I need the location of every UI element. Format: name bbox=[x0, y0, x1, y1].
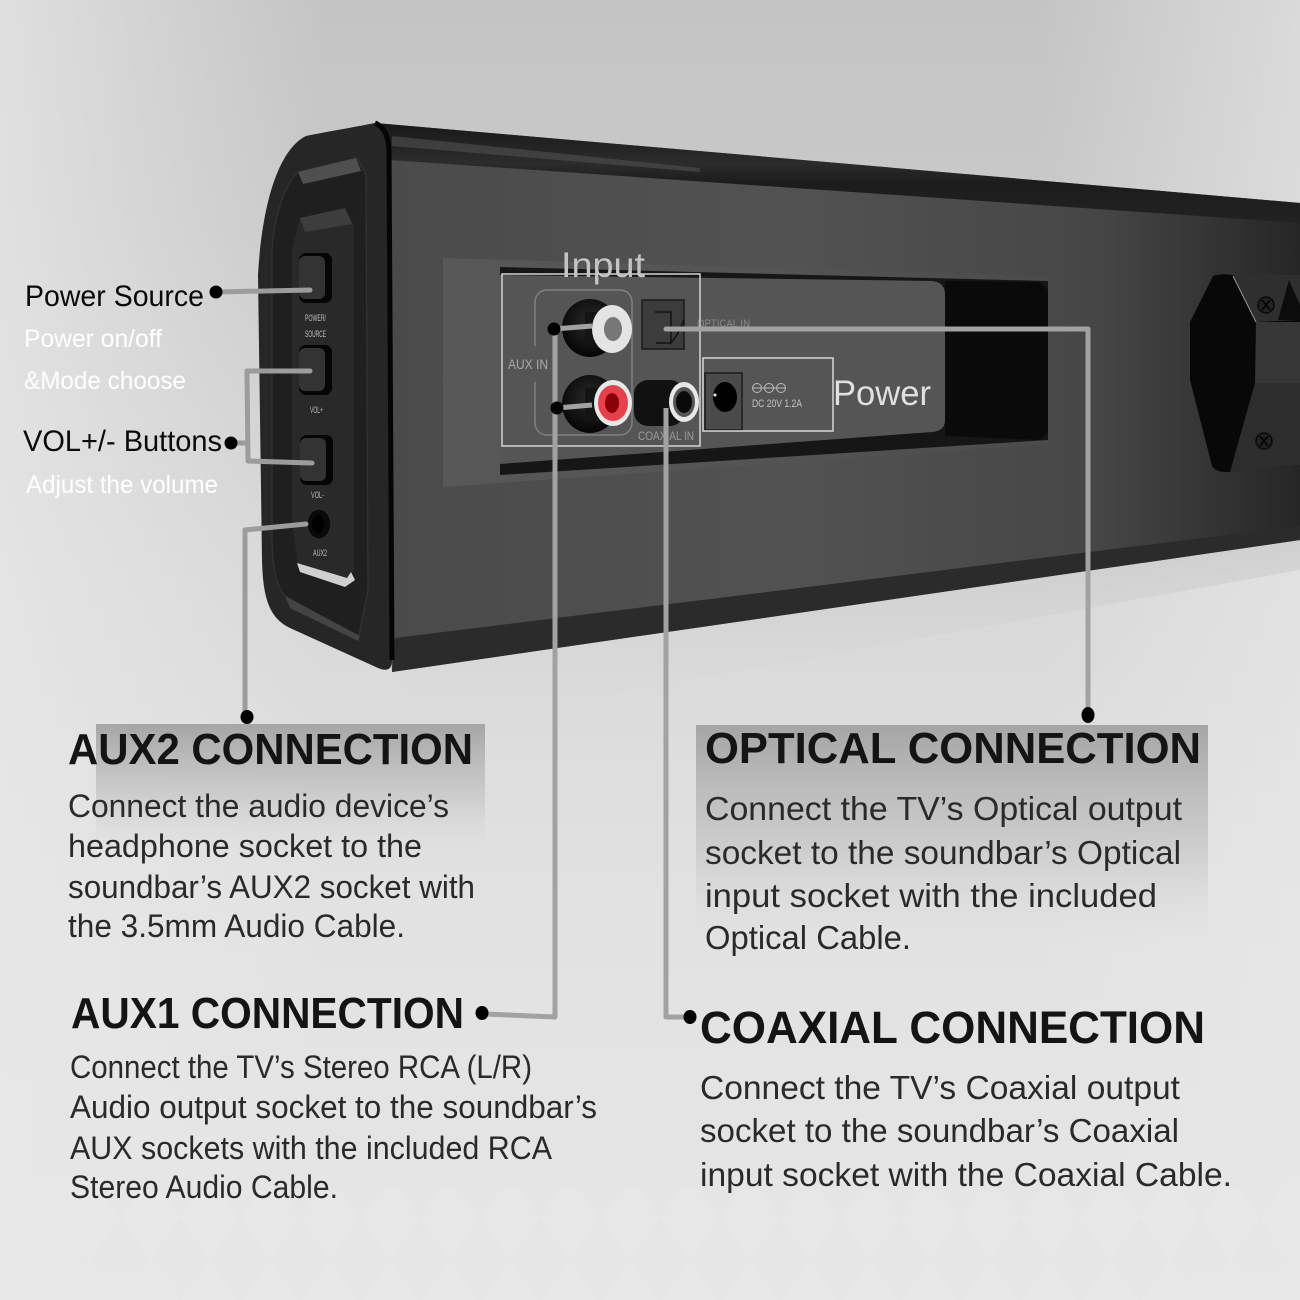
power button bbox=[299, 253, 332, 303]
optical socket: OPTICAL IN bbox=[697, 318, 750, 330]
rear recessed panel bbox=[443, 258, 1048, 487]
soundbar bbox=[258, 123, 1300, 672]
coaxial socket bbox=[634, 380, 699, 426]
panel highlight bottom bbox=[297, 563, 355, 587]
AUX2 jack bbox=[307, 509, 331, 539]
power label: Power bbox=[833, 374, 931, 413]
AUX2 body bbox=[68, 788, 475, 944]
VOL- button bbox=[300, 435, 333, 485]
coaxial body: Connect the TV’s Coaxial output bbox=[700, 1069, 1180, 1106]
soundbar top band bbox=[375, 123, 1300, 223]
soundbar bottom strip bbox=[392, 526, 1300, 672]
button panel bbox=[292, 208, 354, 586]
end cap seam bbox=[375, 123, 392, 660]
VOL+ button bbox=[299, 345, 332, 395]
panel: optical connection bbox=[696, 724, 1208, 956]
white RCA socket bbox=[562, 299, 632, 357]
panel: AUX2 connection bbox=[68, 724, 485, 944]
side labels: AUX2 bbox=[313, 548, 327, 558]
AUX2 backdrop bbox=[96, 724, 485, 854]
AUX inputs bracket: AUX IN bbox=[508, 356, 548, 372]
AUX inputs bracket bbox=[508, 290, 632, 435]
wall mount bracket bbox=[1190, 274, 1300, 472]
soundbar end cap bbox=[258, 123, 392, 670]
callout: volume buttons bbox=[23, 425, 222, 499]
side labels: VOL+ bbox=[310, 405, 323, 415]
optical body: input socket with the included bbox=[705, 877, 1157, 914]
callout: power source: Power Source bbox=[25, 280, 204, 313]
coaxial body: input socket with the Coaxial Cable. bbox=[700, 1156, 1232, 1193]
optical body: Connect the TV’s Optical output bbox=[705, 790, 1182, 827]
cavity opening bbox=[945, 281, 1048, 440]
lower bevel highlight bbox=[285, 596, 360, 641]
callout: volume buttons: VOL+/- Buttons bbox=[23, 425, 222, 458]
soundbar reflection bbox=[390, 540, 1300, 725]
connector: AUX1 bbox=[476, 322, 592, 1020]
AUX2 body: the 3.5mm Audio Cable. bbox=[68, 908, 405, 944]
red RCA socket bbox=[562, 375, 632, 433]
optical body: Optical Cable. bbox=[705, 919, 911, 956]
callout: power source bbox=[24, 280, 204, 395]
AUX1 heading: AUX1 CONNECTION bbox=[71, 989, 464, 1038]
upper bevel highlight bbox=[298, 158, 361, 184]
coaxial label: COAXIAL IN bbox=[638, 429, 694, 443]
callout: power source: &Mode choose bbox=[24, 367, 186, 395]
connector: coaxial bbox=[666, 408, 696, 1024]
AUX1 body: Audio output socket to the soundbar’s bbox=[70, 1089, 597, 1125]
AUX1 body bbox=[70, 1049, 597, 1205]
side labels: POWER/ bbox=[305, 313, 326, 323]
top band highlight bbox=[392, 136, 700, 172]
power socket: DC 20V 1.2A bbox=[752, 398, 803, 410]
side labels bbox=[305, 313, 327, 558]
AUX2 body: Connect the audio device’s bbox=[68, 788, 449, 824]
soundbar front face bbox=[375, 123, 1300, 672]
optical backdrop bbox=[696, 725, 1208, 945]
coaxial body bbox=[700, 1069, 1232, 1193]
AUX1 body: Connect the TV’s Stereo RCA (L/R) bbox=[70, 1049, 532, 1085]
connector: AUX2 bbox=[240, 524, 306, 724]
coaxial heading: COAXIAL CONNECTION bbox=[700, 1002, 1205, 1053]
coaxial body: socket to the soundbar’s Coaxial bbox=[700, 1112, 1179, 1149]
connector cavity bbox=[500, 267, 1048, 475]
optical body: socket to the soundbar’s Optical bbox=[705, 834, 1181, 871]
panel: coaxial connection bbox=[700, 1002, 1232, 1193]
power socket bbox=[705, 373, 803, 430]
panel highlight top bbox=[300, 208, 352, 232]
optical heading: OPTICAL CONNECTION bbox=[705, 724, 1201, 773]
connector: power source bbox=[210, 286, 310, 298]
AUX1 body: Stereo Audio Cable. bbox=[70, 1169, 338, 1205]
optical body bbox=[705, 790, 1182, 956]
AUX2 heading: AUX2 CONNECTION bbox=[68, 725, 473, 774]
connector: optical bbox=[666, 329, 1094, 723]
panel: AUX1 connection bbox=[70, 989, 597, 1205]
callout: volume buttons: Adjust the volume bbox=[26, 471, 218, 499]
AUX2 body: headphone socket to the bbox=[68, 828, 422, 864]
input label: Input bbox=[561, 246, 645, 285]
side labels: SOURCE bbox=[305, 329, 326, 339]
input highlight box bbox=[502, 274, 700, 446]
AUX2 body: soundbar’s AUX2 socket with bbox=[68, 869, 475, 905]
power highlight box bbox=[703, 358, 833, 431]
side labels: VOL- bbox=[311, 490, 324, 500]
optical socket bbox=[642, 300, 750, 349]
AUX1 body: AUX sockets with the included RCA bbox=[70, 1130, 553, 1166]
callout: power source: Power on/off bbox=[24, 325, 162, 353]
end cap inner bevel bbox=[272, 158, 368, 640]
connector: volume bbox=[224, 371, 312, 463]
connector plate bbox=[500, 275, 945, 464]
